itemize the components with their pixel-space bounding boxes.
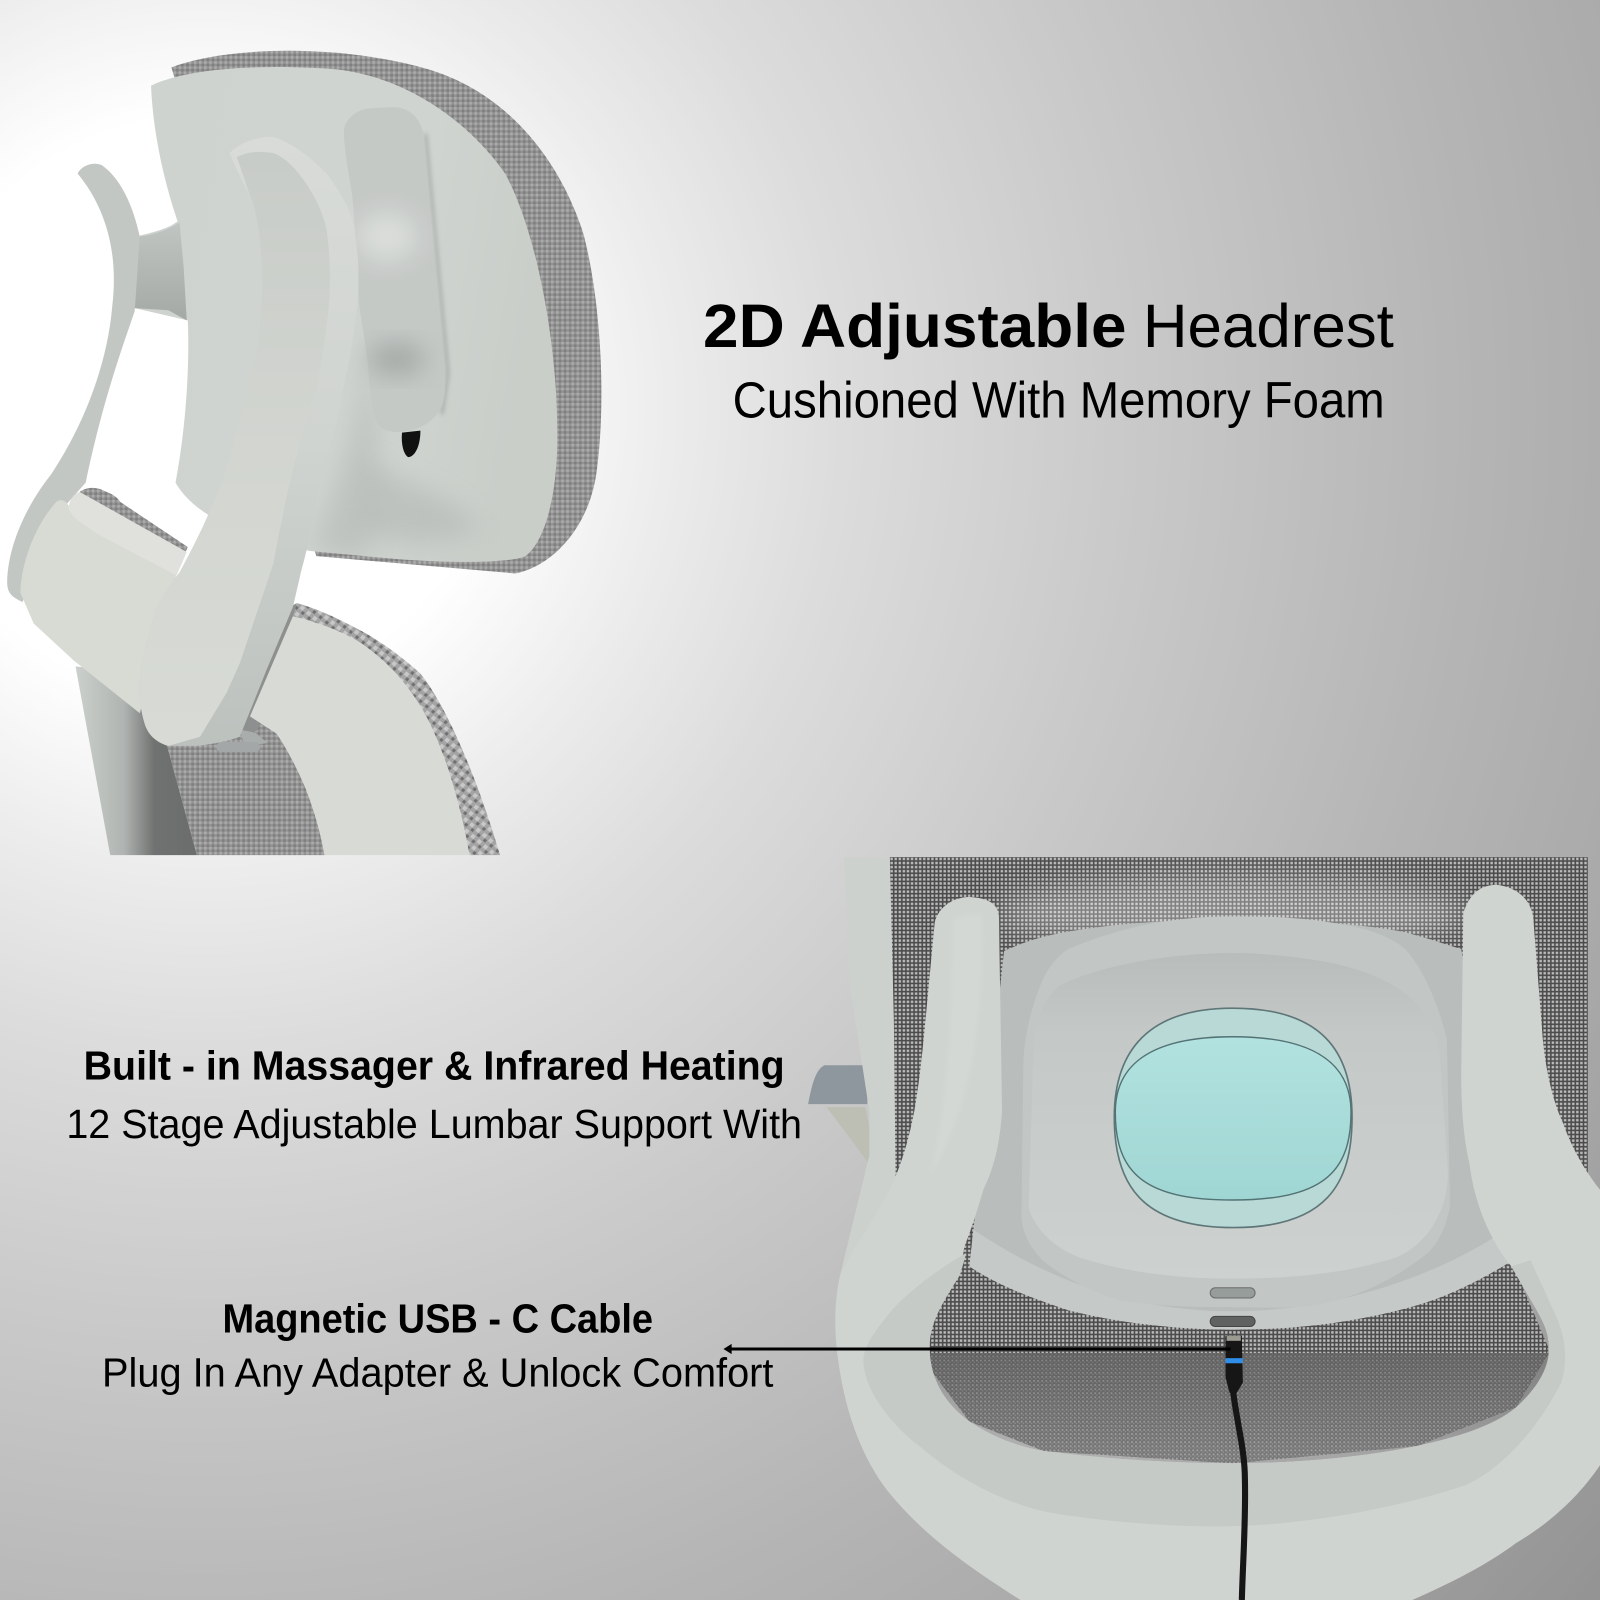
backrest plastic frame bbox=[250, 616, 469, 855]
arrow from connector to cable label bbox=[723, 1344, 1231, 1354]
feature text: USB-C cable bbox=[102, 1296, 774, 1396]
feature text: USB-C cable: Magnetic USB - C Cable bbox=[222, 1296, 653, 1342]
gap shadow between arm and frame bbox=[237, 603, 297, 737]
lumbar back plate bbox=[969, 919, 1511, 1330]
front arm of headrest bracket bbox=[140, 137, 359, 746]
photo: headrest bbox=[7, 51, 601, 855]
backrest mesh panel bbox=[153, 709, 324, 855]
lumbar lower plate highlight bbox=[969, 1230, 1511, 1330]
bolt bbox=[216, 730, 267, 752]
lumbar pad outer layer bbox=[1021, 916, 1450, 1308]
headrest plastic shell bbox=[135, 67, 557, 562]
subheading: memory foam: Cushioned With Memory Foam bbox=[733, 371, 1385, 428]
arm outer rim bbox=[140, 137, 359, 746]
feature text: massager: 12 Stage Adjustable Lumbar Support With bbox=[66, 1101, 802, 1147]
frame badges bbox=[1210, 1288, 1255, 1327]
U-shaped chair frame bbox=[835, 885, 1600, 1600]
massager teal backing bbox=[1114, 1008, 1352, 1228]
lumbar pad inner layer bbox=[1029, 953, 1448, 1279]
neck joint bbox=[135, 222, 187, 320]
height adjustment slider bbox=[344, 107, 445, 432]
back mesh bbox=[890, 857, 1588, 1286]
feature text: massager bbox=[66, 1043, 802, 1147]
magnetic USB-C connector and cable bbox=[1226, 1336, 1245, 1600]
mesh pad under bracket bbox=[80, 488, 188, 561]
massager teal cushion bbox=[1115, 1037, 1351, 1200]
heading: headrest bbox=[703, 292, 1394, 360]
bracket raised lip bbox=[68, 492, 187, 576]
heading: headrest: Headrest bbox=[1143, 292, 1394, 360]
arm inner face bbox=[140, 152, 330, 746]
rear arm of headrest bracket bbox=[7, 164, 140, 602]
woven edge band bbox=[293, 603, 500, 855]
blue LED ring bbox=[1226, 1358, 1243, 1363]
lower seat mesh window bbox=[927, 1260, 1551, 1463]
rear post bbox=[76, 666, 197, 855]
armrest stub bbox=[808, 1065, 880, 1179]
headrest mesh cushion bbox=[171, 51, 601, 573]
photo: chair back with lumbar massager bbox=[808, 857, 1600, 1600]
adjustment slot bbox=[402, 431, 420, 457]
bracket cross piece bbox=[20, 500, 177, 713]
frame inner band bbox=[863, 1253, 1565, 1527]
shell shading bbox=[317, 133, 466, 556]
backrest lower frame bbox=[76, 603, 500, 855]
heading: headrest: 2D Adjustable bbox=[703, 292, 1127, 360]
outer left frame post bbox=[840, 857, 896, 1277]
feature text: massager: Built - in Massager & Infrared Heating bbox=[84, 1043, 785, 1089]
feature text: USB-C cable: Plug In Any Adapter & Unlock Comfort bbox=[102, 1350, 774, 1396]
